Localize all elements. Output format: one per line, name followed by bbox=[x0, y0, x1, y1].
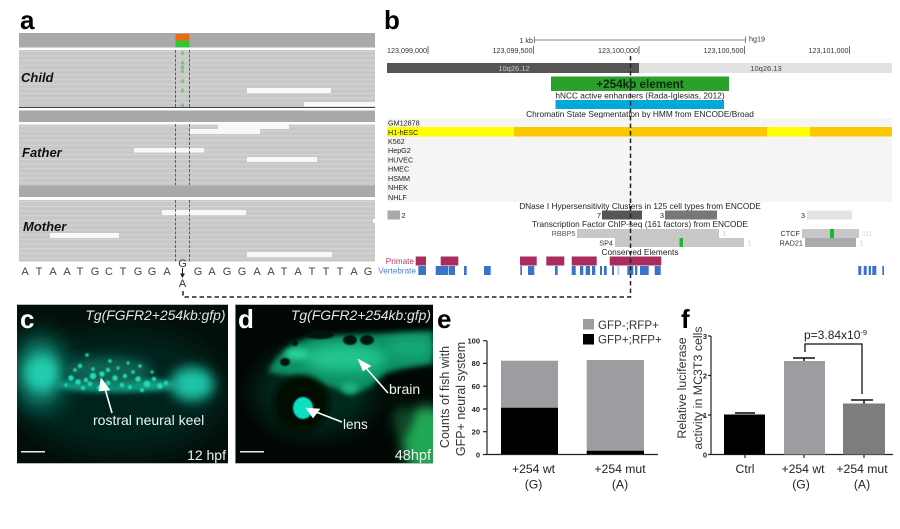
variant column guides bbox=[176, 50, 190, 262]
DNA sequence: G bbox=[91, 266, 99, 278]
significance bracket bbox=[805, 344, 862, 394]
DNA sequence: A bbox=[253, 266, 261, 278]
x labels: (G) bbox=[792, 478, 810, 492]
label Mother: Mother bbox=[23, 219, 67, 234]
chromatin state title: Chromatin State Segmentation by HMM from ENCODE/Broad bbox=[526, 109, 754, 119]
eye bbox=[273, 375, 329, 431]
variant A marks: A bbox=[181, 69, 185, 75]
hNCC enhancers: hNCC active enhancers (Rada-Iglesias, 2012) bbox=[555, 90, 725, 100]
label lens: lens bbox=[343, 417, 368, 432]
TF tracks: 1 bbox=[860, 238, 864, 248]
variant A marks: A bbox=[181, 60, 185, 66]
DNase clusters: 3 bbox=[801, 211, 805, 220]
transgene title: Tg(FGFR2+254kb:gfp) bbox=[291, 307, 431, 323]
DNA sequence: C bbox=[105, 266, 113, 278]
coordinates: 123,100,000 bbox=[598, 46, 638, 55]
mother reads bbox=[19, 200, 375, 262]
label rostral neural keel: rostral neural keel bbox=[93, 412, 204, 428]
bar +254 wt bbox=[501, 361, 558, 454]
panel c: 12 hpf embryo photo bbox=[16, 304, 228, 464]
DNase title: DNase I Hypersensitivity Clusters in 125 cell types from ENCODE bbox=[519, 201, 761, 211]
variant A marks: A bbox=[181, 79, 185, 85]
axes: 60 bbox=[472, 382, 480, 391]
chromatin state tracks: HepG2 bbox=[388, 146, 411, 155]
x labels bbox=[512, 462, 646, 492]
lens arrow bbox=[306, 408, 342, 422]
panel f: luciferase bar chart bbox=[675, 304, 893, 492]
panel d: 48 hpf larva photo bbox=[235, 304, 433, 464]
bar +254 mut bbox=[587, 360, 644, 454]
panel b: genome browser bbox=[378, 5, 892, 276]
DNA sequence: G bbox=[238, 266, 246, 278]
x labels bbox=[736, 462, 888, 492]
axes: 3 bbox=[703, 332, 707, 341]
lens bbox=[293, 397, 313, 419]
mother coverage track bbox=[19, 186, 375, 197]
DNA sequence: A bbox=[49, 266, 57, 278]
chromatin state tracks: K562 bbox=[388, 137, 405, 146]
bar Ctrl bbox=[724, 413, 765, 454]
DNase clusters bbox=[388, 210, 852, 220]
dark pigment spots bbox=[280, 331, 374, 366]
panel letter d: d bbox=[238, 304, 254, 334]
panel a: sequencing reads bbox=[19, 5, 375, 290]
dashed connector bbox=[183, 56, 630, 297]
label brain: brain bbox=[389, 381, 420, 397]
axes: 80 bbox=[472, 359, 480, 368]
conserved elements title: Conserved Elements bbox=[601, 247, 679, 257]
scale bar bbox=[519, 34, 765, 45]
vertebrate track: Vertebrate bbox=[378, 266, 416, 276]
brain arrow bbox=[358, 359, 388, 393]
panel letter f: f bbox=[681, 304, 690, 334]
ideogram: 10q26.12 bbox=[498, 64, 530, 73]
scale bar bbox=[21, 451, 45, 452]
panel e: stacked bar chart bbox=[437, 304, 662, 492]
child coverage track bbox=[19, 33, 375, 48]
coordinates: 123,101,000 bbox=[809, 46, 848, 55]
chromatin state tracks: NHEK bbox=[388, 183, 408, 192]
TF title: Transcription Factor ChIP-seq (161 factors) from ENCODE bbox=[532, 219, 748, 229]
DNA sequence: A bbox=[350, 266, 358, 278]
y axis title bbox=[675, 326, 705, 450]
chromatin state tracks: HMEC bbox=[388, 164, 409, 174]
y axis title: activity in MC3T3 cells bbox=[691, 326, 705, 450]
variant A marks: A bbox=[181, 88, 185, 94]
TF tracks: SP4 bbox=[599, 238, 613, 248]
DNA sequence: A bbox=[163, 266, 171, 278]
father reads bbox=[19, 123, 375, 186]
legend bbox=[583, 319, 662, 346]
chromatin state tracks: NHLF bbox=[388, 193, 407, 202]
panel letter c: c bbox=[20, 304, 34, 334]
label Father: Father bbox=[22, 145, 63, 160]
legend: GFP-;RFP+ bbox=[598, 319, 659, 332]
coordinates: 123,099,000 bbox=[387, 46, 427, 55]
father coverage track bbox=[19, 110, 375, 122]
DNA sequence: T bbox=[77, 266, 84, 278]
yolk bbox=[393, 398, 433, 463]
TF tracks: RAD21 bbox=[779, 238, 803, 248]
axes: 100 bbox=[467, 336, 480, 346]
DNase clusters: 3 bbox=[660, 211, 664, 220]
axes: 40 bbox=[472, 405, 480, 414]
panel letter b: b bbox=[384, 5, 400, 35]
axes: 2 bbox=[703, 372, 707, 380]
DNA sequence: T bbox=[36, 266, 43, 278]
legend: GFP+;RFP+ bbox=[598, 334, 662, 346]
x labels: +254 mut bbox=[836, 462, 888, 476]
TF tracks bbox=[552, 229, 874, 248]
DNA sequence bbox=[21, 266, 372, 278]
variant G to A bbox=[178, 258, 187, 290]
stage label: 48hpf bbox=[395, 448, 432, 464]
y axis title: GFP+ neural system bbox=[454, 342, 468, 456]
x labels: (G) bbox=[525, 478, 542, 492]
variant A marks: A bbox=[181, 51, 185, 57]
DNA sequence: T bbox=[309, 266, 316, 278]
DNA sequence: A bbox=[294, 266, 302, 278]
transgene title: Tg(FGFR2+254kb:gfp) bbox=[85, 307, 226, 323]
variant coverage bar bbox=[176, 34, 190, 48]
DNA sequence: G bbox=[134, 266, 142, 278]
axes: 1 bbox=[703, 411, 707, 420]
variant A marks bbox=[181, 51, 185, 109]
variant A marks: A bbox=[181, 65, 185, 71]
label Child: Child bbox=[21, 70, 55, 85]
axes: 0 bbox=[703, 450, 707, 460]
panel letter e: e bbox=[437, 304, 451, 334]
DNA sequence: A bbox=[21, 266, 29, 278]
y axis title: Relative luciferase bbox=[675, 337, 689, 439]
x labels: (A) bbox=[854, 478, 870, 492]
TF tracks: RBBP5 bbox=[552, 229, 576, 238]
x labels: +254 wt bbox=[512, 462, 556, 476]
x labels: (A) bbox=[612, 478, 628, 492]
coordinates bbox=[387, 46, 850, 55]
DNA sequence: G bbox=[223, 266, 231, 278]
x labels: +254 wt bbox=[781, 462, 825, 476]
child reads bbox=[19, 50, 375, 107]
variant A marks: A bbox=[181, 103, 185, 109]
DNA sequence: G bbox=[148, 266, 156, 278]
axes bbox=[703, 332, 893, 460]
hNCC enhancers bbox=[555, 90, 725, 109]
chromatin state tracks bbox=[387, 118, 892, 202]
x labels: +254 mut bbox=[594, 462, 646, 476]
ideogram bbox=[387, 63, 892, 73]
chromatin state tracks: HUVEC bbox=[388, 156, 413, 164]
+254kb element: +254kb element bbox=[596, 78, 684, 91]
DNA sequence: G bbox=[194, 266, 202, 278]
DNA sequence: A bbox=[63, 266, 71, 278]
panel letter a: a bbox=[20, 5, 35, 35]
bar +254 wt bbox=[784, 358, 825, 454]
coordinates: 123,100,500 bbox=[704, 46, 744, 55]
y axis title bbox=[438, 342, 468, 456]
fluorescent cells bbox=[64, 353, 168, 392]
coordinates: 123,099,500 bbox=[493, 46, 532, 55]
ideogram: 10q26.13 bbox=[750, 64, 782, 73]
variant G to A: A bbox=[179, 278, 187, 290]
chromatin state tracks: GM12878 bbox=[388, 118, 420, 128]
p value: p=3.84x10 bbox=[804, 328, 860, 342]
TF tracks: 1 bbox=[748, 238, 752, 248]
x labels: Ctrl bbox=[736, 462, 754, 476]
variant G to A: G bbox=[178, 258, 187, 270]
p value: -9 bbox=[860, 328, 867, 337]
axes: 0 bbox=[476, 450, 480, 459]
DNA sequence: A bbox=[267, 266, 275, 278]
arrow bbox=[99, 378, 112, 413]
scale bar: 1 kb bbox=[519, 36, 533, 45]
chromatin state tracks: H1-hESC bbox=[388, 128, 418, 137]
primate track bbox=[386, 256, 661, 266]
chromatin state tracks: HSMM bbox=[388, 174, 410, 183]
primate track: Primate bbox=[386, 257, 414, 266]
TF tracks: 11L bbox=[862, 229, 874, 238]
vertebrate track bbox=[378, 266, 884, 276]
stage label: 12 hpf bbox=[187, 447, 226, 463]
bar +254 mut bbox=[843, 400, 885, 454]
DNase clusters: 7 bbox=[597, 211, 601, 220]
DNA sequence: T bbox=[337, 266, 344, 278]
DNA sequence: T bbox=[281, 266, 288, 278]
y axis title: Counts of fish with bbox=[438, 346, 452, 448]
DNA sequence: T bbox=[323, 266, 330, 278]
DNA sequence: T bbox=[120, 266, 127, 278]
scale bar: hg19 bbox=[749, 34, 765, 44]
DNase clusters: 2 bbox=[402, 211, 406, 220]
axes: 20 bbox=[472, 428, 480, 436]
DNA sequence: A bbox=[208, 266, 216, 278]
TF tracks: CTCF bbox=[781, 229, 801, 238]
scale bar bbox=[240, 451, 264, 452]
axes bbox=[467, 336, 658, 459]
DNA sequence: G bbox=[364, 266, 372, 278]
+254kb element bbox=[551, 76, 729, 91]
TF tracks: 1 bbox=[722, 229, 727, 238]
